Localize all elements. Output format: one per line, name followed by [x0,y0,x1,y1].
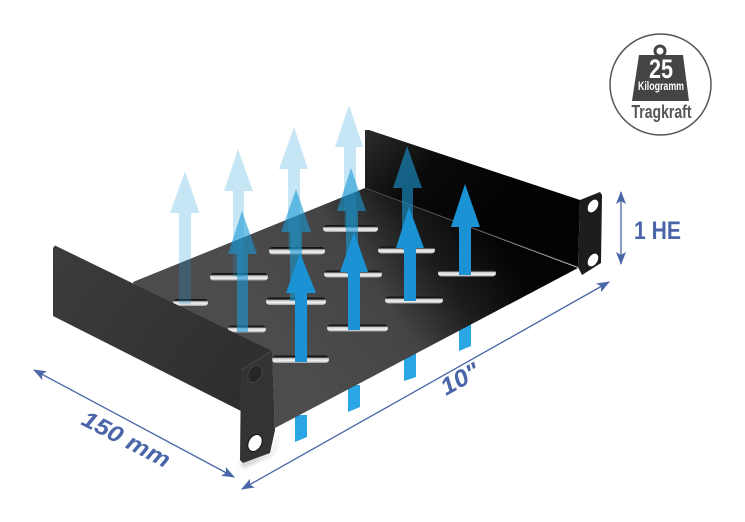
dimension arrow: height [620,192,622,264]
upper rear hole [585,198,601,214]
airflow strips below the shelf [295,320,471,442]
front row of solid airflow arrows [286,184,480,362]
load capacity badge [610,34,711,135]
front mounting ear [240,351,275,463]
left side panel [53,246,272,411]
lower mounting hole [245,432,265,454]
middle row of airflow arrows [228,146,422,332]
rear mounting ear [578,192,602,275]
rear row of faint airflow arrows [170,105,363,304]
icon: weight [632,46,689,101]
upper mounting hole [245,363,265,385]
shelf floor [133,188,578,428]
shelf shadow [240,430,280,468]
lower rear hole [585,252,601,268]
badge caption: Tragkraft [632,102,692,122]
dimension arrow: width [242,282,609,489]
weight unit: Kilogramm [638,79,684,93]
dimension arrow: depth [34,370,234,477]
ventilation slots [173,225,496,363]
rear side panel [365,130,580,267]
dimension label: 150 mm: 150 mm [78,405,175,473]
dimension label: 1 HE: 1 HE [634,217,681,245]
dimension label: 10 inch: 10" [436,357,485,401]
weight value: 25 [649,54,673,84]
